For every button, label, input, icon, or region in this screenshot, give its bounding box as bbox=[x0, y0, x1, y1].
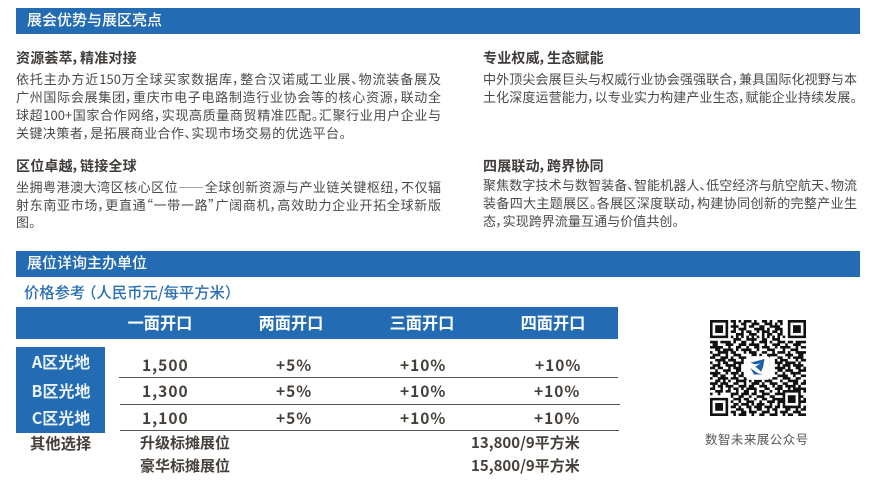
row: area C: +5% bbox=[276, 407, 312, 429]
text block: authority bbox=[483, 48, 857, 106]
subheading: resources: 资源荟萃，精准对接 bbox=[16, 48, 137, 68]
row: area A: +10% bbox=[535, 354, 581, 376]
row labels panel: A区光地 bbox=[32, 349, 90, 373]
column: four sides open: 四面开口 bbox=[521, 310, 585, 334]
row: area A: +10% bbox=[400, 354, 446, 376]
upgraded booth row: 13,800/9平方米 bbox=[471, 432, 580, 453]
deluxe booth row bbox=[140, 455, 580, 476]
row labels panel: B区光地 bbox=[32, 378, 90, 402]
subheading: authority: 专业权威，生态赋能 bbox=[483, 48, 604, 68]
body: authority: 中外顶尖会展巨头与权威行业协会强强联合，兼具国际化视野与本 bbox=[483, 69, 857, 88]
body: authority: 土化深度运营能力，以专业实力构建产业生态，赋能企业持续发展。 bbox=[483, 87, 857, 106]
price table bbox=[16, 307, 620, 476]
row: area B bbox=[120, 380, 620, 405]
body: four halls: 装备四大主题展区。各展区深度联动，构建协同创新的完整产业生 bbox=[483, 193, 857, 212]
row: area B: +10% bbox=[400, 380, 446, 402]
row: area B: +10% bbox=[534, 380, 580, 402]
body: location: 图。 bbox=[16, 212, 36, 231]
icon: QR code bbox=[710, 320, 806, 416]
table header row bbox=[16, 307, 618, 339]
row: area A bbox=[119, 354, 618, 378]
section header: booth enquiries bbox=[16, 251, 860, 277]
row: area A: +5% bbox=[276, 354, 312, 376]
deluxe booth row: 15,800/9平方米 bbox=[471, 455, 580, 476]
row: area C: +10% bbox=[400, 407, 446, 429]
body: resources: 球超100+国家合作网络，实现高质量商贸精准匹配。汇聚行业用户企业与 bbox=[16, 105, 441, 124]
text block: resources bbox=[16, 48, 441, 142]
column: one side open: 一面开口 bbox=[128, 310, 192, 334]
body: resources: 广州国际会展集团，重庆市电子电路制造行业协会等的核心资源，联动全 bbox=[16, 87, 441, 106]
body: four halls bbox=[483, 175, 857, 230]
price subtitle: 价格参考（人民币元/每平方米） bbox=[24, 281, 240, 303]
deluxe booth row: 豪华标摊展位 bbox=[140, 455, 230, 476]
body: resources: 依托主办方近150万全球买家数据库，整合汉诺威工业展、物流装备展及 bbox=[16, 69, 441, 88]
body: resources bbox=[16, 69, 441, 142]
row labels panel: C区光地 bbox=[32, 405, 90, 429]
body: four halls: 态，实现跨界流量互通与价值共创。 bbox=[483, 210, 679, 230]
body: resources: 关键决策者，是拓展商业合作、实现市场交易的优选平台。 bbox=[16, 122, 346, 142]
section header: exhibition advantages bbox=[16, 8, 860, 34]
body: location bbox=[16, 177, 441, 231]
column: three sides open: 三面开口 bbox=[390, 310, 454, 334]
body: location: 坐拥粤港澳大湾区核心区位——全球创新资源与产业链关键枢纽，不仅辐 bbox=[16, 177, 441, 196]
body: location: 射东南亚市场，更直通“一带一路”广阔商机，高效助力企业开拓全球新版 bbox=[16, 195, 441, 214]
row labels panel bbox=[16, 347, 105, 433]
other options label: 其他选择 bbox=[30, 432, 91, 454]
column: two sides open: 两面开口 bbox=[259, 310, 323, 334]
text block: location bbox=[16, 156, 441, 231]
QR caption: 数智未来展公众号 bbox=[705, 429, 809, 448]
row: area C: 1,100 bbox=[142, 407, 189, 429]
heading text: 展位详询主办单位 bbox=[27, 252, 147, 273]
row: area C bbox=[120, 407, 619, 431]
upgraded booth row: 升级标摊展位 bbox=[140, 432, 230, 453]
subheading: location: 区位卓越，链接全球 bbox=[16, 156, 137, 176]
body: four halls: 聚焦数字技术与数智装备、智能机器人、低空经济与航空航天、物流 bbox=[483, 175, 857, 194]
subheading: four halls: 四展联动，跨界协同 bbox=[483, 156, 604, 176]
upgraded booth row bbox=[140, 432, 580, 453]
row: area B: 1,300 bbox=[142, 380, 189, 402]
body: authority bbox=[483, 69, 857, 106]
row: area A: 1,500 bbox=[142, 354, 189, 376]
text block: four halls bbox=[483, 156, 857, 230]
row: area B: +5% bbox=[276, 380, 312, 402]
heading text: 展会优势与展区亮点 bbox=[27, 9, 162, 30]
row: area C: +10% bbox=[534, 407, 580, 429]
